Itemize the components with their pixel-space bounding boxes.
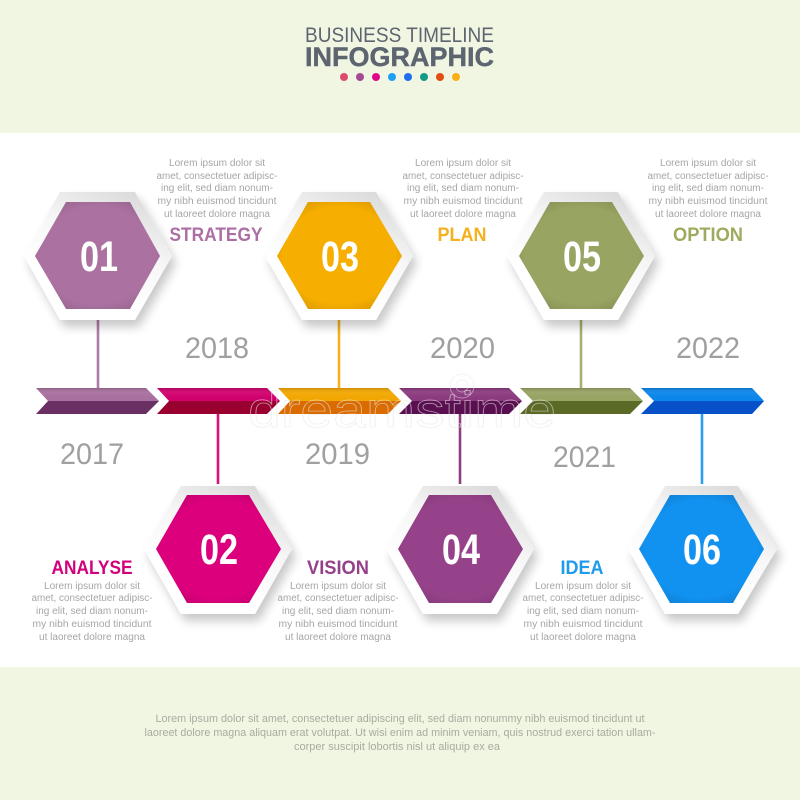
text block: option: Lorem ipsum dolor sit <box>660 158 756 169</box>
hexagon 03: 03 <box>321 233 359 281</box>
text block: strategy: ut laoreet dolore magna <box>164 209 270 220</box>
heading: plan: PLAN <box>438 225 486 246</box>
year labels: 2022 <box>676 332 740 365</box>
hexagon 06: 06 <box>683 526 721 574</box>
text block: vision <box>278 581 398 643</box>
footer text: laoreet dolore magna aliquam erat volutpat. Ut wisi enim ad minim veniam, quis nostrud exerci tation ullam- <box>144 727 656 739</box>
heading: option: OPTION <box>673 225 743 246</box>
text block: idea: amet, consectetuer adipisc- <box>522 593 644 604</box>
text block: strategy <box>156 158 278 220</box>
text block: plan: my nibh euismod tincidunt <box>404 196 523 207</box>
hexagon 04 <box>386 486 534 614</box>
arrow segment 3 <box>278 388 401 414</box>
text block: vision: my nibh euismod tincidunt <box>278 619 398 630</box>
text block: option: ut laoreet dolore magna <box>655 209 761 220</box>
text block: idea: Lorem ipsum dolor sit <box>535 581 631 592</box>
text block: analyse: amet, consectetuer adipisc- <box>32 593 152 604</box>
hexagon 01 <box>24 192 172 320</box>
year labels: 2020 <box>430 332 495 365</box>
text block: strategy: Lorem ipsum dolor sit <box>169 158 265 169</box>
text block: option: amet, consectetuer adipisc- <box>648 171 768 182</box>
top band <box>0 0 800 133</box>
text block: analyse: my nibh euismod tincidunt <box>32 619 152 630</box>
footer text <box>144 713 656 753</box>
arrow segment 6 <box>641 388 764 414</box>
heading: strategy: STRATEGY <box>170 225 263 246</box>
hexagon 02: 02 <box>200 526 238 574</box>
text block: analyse <box>32 581 152 643</box>
heading: idea: IDEA <box>560 558 604 579</box>
hexagon 03 <box>265 192 413 320</box>
arrow segment 5 <box>520 388 643 414</box>
text block: vision: amet, consectetuer adipisc- <box>278 593 398 604</box>
text block: idea: my nibh euismod tincidunt <box>524 619 643 630</box>
text block: plan <box>402 158 524 220</box>
footer text: corper suscipit lobortis nisl ut aliquip ex ea <box>294 741 501 753</box>
hexagon 05 <box>507 192 655 320</box>
text block: idea: ut laoreet dolore magna <box>530 632 636 643</box>
watermark: dreamstime <box>248 382 556 438</box>
year labels <box>60 332 740 474</box>
title: BUSINESS TIMELINE <box>305 24 494 47</box>
text block: vision: ut laoreet dolore magna <box>285 632 391 643</box>
hexagon 01: 01 <box>80 233 118 281</box>
colour dots <box>340 73 460 81</box>
footer text: Lorem ipsum dolor sit amet, consectetuer adipiscing elit, sed diam nonummy nibh euismod tincidunt ut <box>156 713 644 725</box>
text block: strategy: my nibh euismod tincidunt <box>158 196 277 207</box>
heading: vision: VISION <box>307 558 369 579</box>
text block: vision: ing elit, sed diam nonum- <box>282 606 394 617</box>
text block: plan: amet, consectetuer adipisc- <box>402 171 524 182</box>
connector lines <box>98 318 702 484</box>
year labels: 2018 <box>185 332 249 365</box>
arrow segment 4 <box>399 388 522 414</box>
year labels: 2021 <box>553 441 616 474</box>
text block: analyse: Lorem ipsum dolor sit <box>44 581 140 592</box>
title <box>305 24 494 72</box>
text block: strategy: ing elit, sed diam nonum- <box>161 183 273 194</box>
text block: plan: Lorem ipsum dolor sit <box>415 158 511 169</box>
hexagon 04: 04 <box>442 526 480 574</box>
hexagon 06 <box>628 486 777 614</box>
heading: analyse: ANALYSE <box>52 558 132 579</box>
text block: vision: Lorem ipsum dolor sit <box>290 581 386 592</box>
timeline arrows <box>36 388 764 414</box>
text block: idea: ing elit, sed diam nonum- <box>527 606 639 617</box>
text block: option: my nibh euismod tincidunt <box>648 196 768 207</box>
text block: idea <box>522 581 644 643</box>
text block: analyse: ing elit, sed diam nonum- <box>36 606 148 617</box>
text block: strategy: amet, consectetuer adipisc- <box>156 171 278 182</box>
text block: plan: ing elit, sed diam nonum- <box>407 183 519 194</box>
hexagon 02 <box>144 486 292 614</box>
bottom band <box>0 667 800 800</box>
text block: plan: ut laoreet dolore magna <box>410 209 516 220</box>
arrow segment 1 <box>36 388 159 414</box>
text block: analyse: ut laoreet dolore magna <box>39 632 145 643</box>
title: INFOGRAPHIC <box>305 42 494 72</box>
year labels: 2019 <box>305 438 370 471</box>
year labels: 2017 <box>60 438 124 471</box>
text block: option: ing elit, sed diam nonum- <box>652 183 764 194</box>
text block: option <box>648 158 768 220</box>
arrow segment 2 <box>157 388 280 414</box>
hexagon 05: 05 <box>563 233 601 281</box>
